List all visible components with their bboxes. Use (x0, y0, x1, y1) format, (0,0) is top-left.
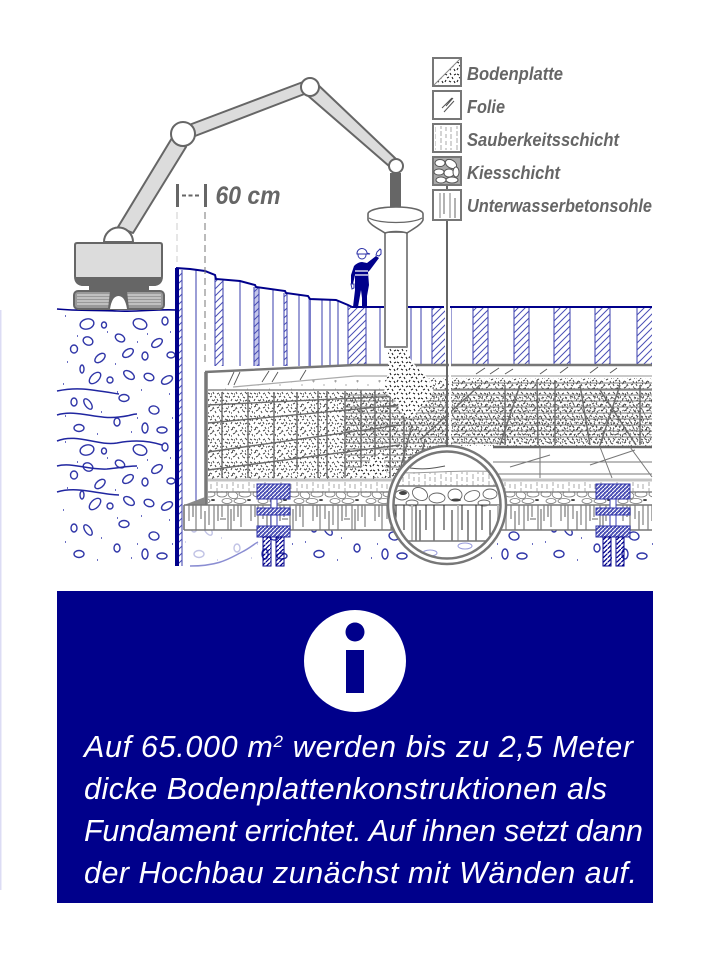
panel: construction diagram (57, 78, 653, 566)
sheet pile wall (175, 268, 652, 566)
legend item: Kiesschicht (433, 157, 561, 185)
crane body (74, 243, 164, 309)
crane joints (104, 78, 403, 242)
legend leader line (446, 185, 448, 447)
soil ground (57, 309, 653, 566)
dimension guide lines (177, 212, 205, 366)
unterwasserbetonsohle slab (184, 497, 652, 530)
leader line gap (449, 308, 451, 446)
bodenplatte layers (205, 365, 652, 505)
magnifier circle (388, 446, 506, 564)
legend item: Bodenplatte (433, 58, 563, 86)
dimension: 60 cm: 60 cm (216, 182, 280, 210)
info text: der Hochbau zunächst mit Wänden auf. (84, 856, 637, 890)
concrete pour (350, 348, 434, 478)
info text: dicke Bodenplattenkonstruktionen als (84, 772, 607, 806)
pump hose (368, 173, 423, 347)
icon: info (304, 610, 406, 712)
worker (351, 248, 381, 307)
legend item: Folie (433, 91, 505, 119)
legend item: Sauberkeitsschicht (433, 124, 620, 152)
dimension: 60 cm (176, 182, 280, 210)
concrete pump crane (74, 78, 423, 347)
crane boom (118, 82, 396, 233)
info text: 2 (272, 732, 283, 751)
page edge tint (0, 310, 2, 890)
legend (433, 58, 652, 220)
info text: werden bis zu 2,5 Meter (284, 730, 635, 764)
legend item: Sauberkeitsschicht: Sauberkeitsschicht (467, 129, 620, 150)
legend item: Unterwasserbetonsohle (433, 190, 652, 220)
legend item: Bodenplatte: Bodenplatte (467, 63, 563, 84)
info text: Auf 65.000 m (84, 730, 273, 764)
legend item: Unterwasserbetonsohle: Unterwasserbetonsohle (467, 195, 652, 216)
info text (82, 730, 643, 890)
legend item: Folie: Folie (467, 96, 505, 117)
info text: Fundament errichtet. Auf ihnen setzt dann (84, 814, 643, 848)
panel: info box (57, 591, 653, 903)
anchor pile left (257, 484, 290, 566)
legend item: Kiesschicht: Kiesschicht (467, 162, 561, 183)
anchor pile right (596, 484, 630, 566)
